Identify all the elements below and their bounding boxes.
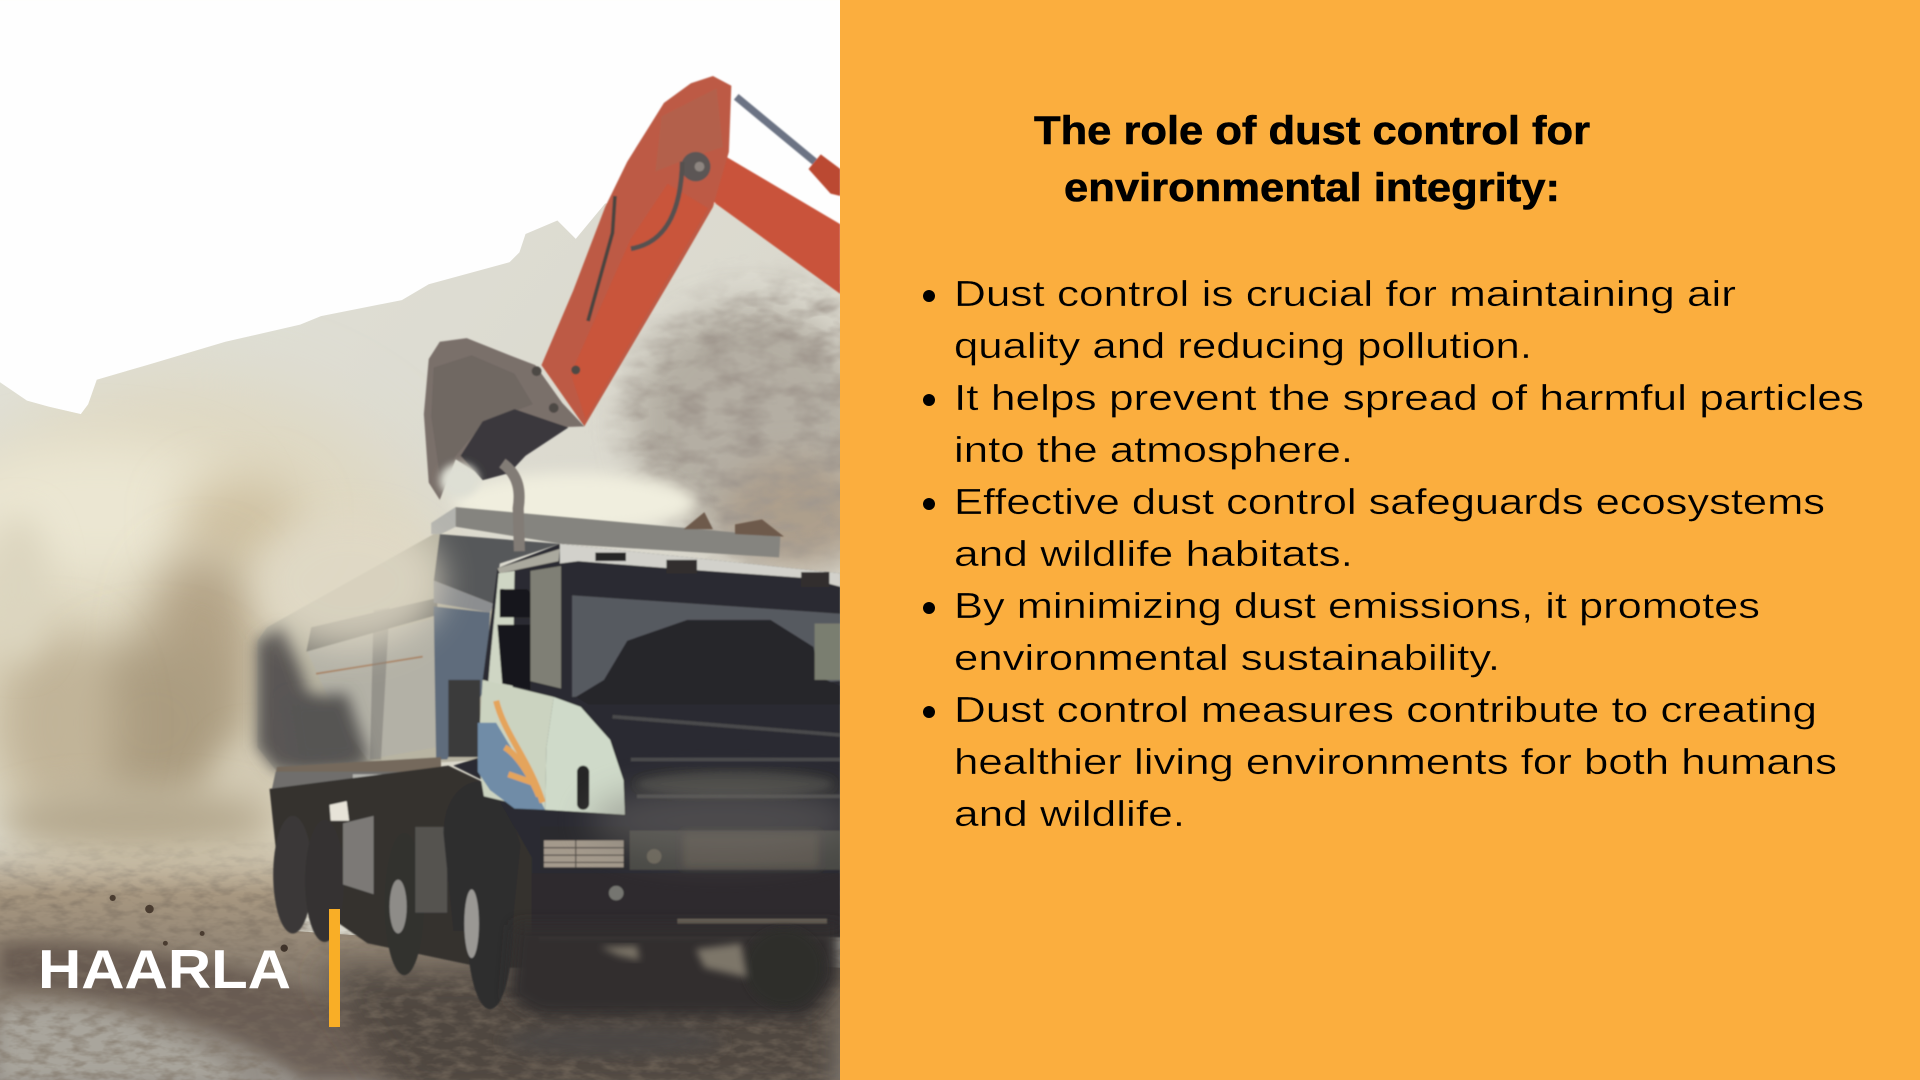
bullet 5 [923, 689, 1837, 834]
bullet 2: into the atmosphere. [954, 429, 1353, 470]
bullet 5: healthier living environments for both humans [954, 741, 1837, 782]
bullet 3: and wildlife habitats. [954, 533, 1353, 574]
heading [1034, 109, 1590, 210]
dust and smoke over truck [257, 515, 858, 1056]
heading: environmental integrity: [1064, 166, 1560, 210]
bullet 1: Dust control is crucial for maintaining air [954, 273, 1736, 314]
bullet 3: Effective dust control safeguards ecosystems [954, 481, 1825, 522]
bullet 2: It helps prevent the spread of harmful particles [954, 377, 1864, 418]
logo text: HAARLA [38, 938, 291, 1000]
dump body [257, 507, 780, 789]
excavator boom [541, 76, 840, 426]
dusty mountain and dust cloud [0, 204, 840, 968]
bullet 3 [923, 481, 1825, 574]
cab body [453, 544, 840, 937]
accent bar [329, 909, 340, 1027]
bullet 5: and wildlife. [954, 793, 1185, 834]
rocks on dump [684, 512, 784, 537]
bullet 4: environmental sustainability. [954, 637, 1500, 678]
dump truck [257, 463, 840, 1009]
heading: The role of dust control for [1034, 109, 1590, 153]
exhaust pipe [502, 463, 519, 551]
bullet 5: Dust control measures contribute to creating [954, 689, 1817, 730]
excavator bucket [424, 338, 584, 500]
panel: photo of excavator loading a dump truck in dust [0, 0, 840, 1080]
bullet 4 [923, 585, 1760, 678]
panel: orange text panel [923, 109, 1864, 834]
bullet list [923, 273, 1864, 834]
headlight and bumper [542, 830, 840, 924]
road surface [0, 842, 840, 1080]
bullet 4: By minimizing dust emissions, it promotes [954, 585, 1760, 626]
bullet 2 [923, 377, 1864, 470]
bullet 1: quality and reducing pollution. [954, 325, 1532, 366]
bullet 1 [923, 273, 1736, 366]
logo: HAARLA wordmark with accent bar [38, 909, 340, 1027]
chassis and wheels [270, 766, 539, 1009]
